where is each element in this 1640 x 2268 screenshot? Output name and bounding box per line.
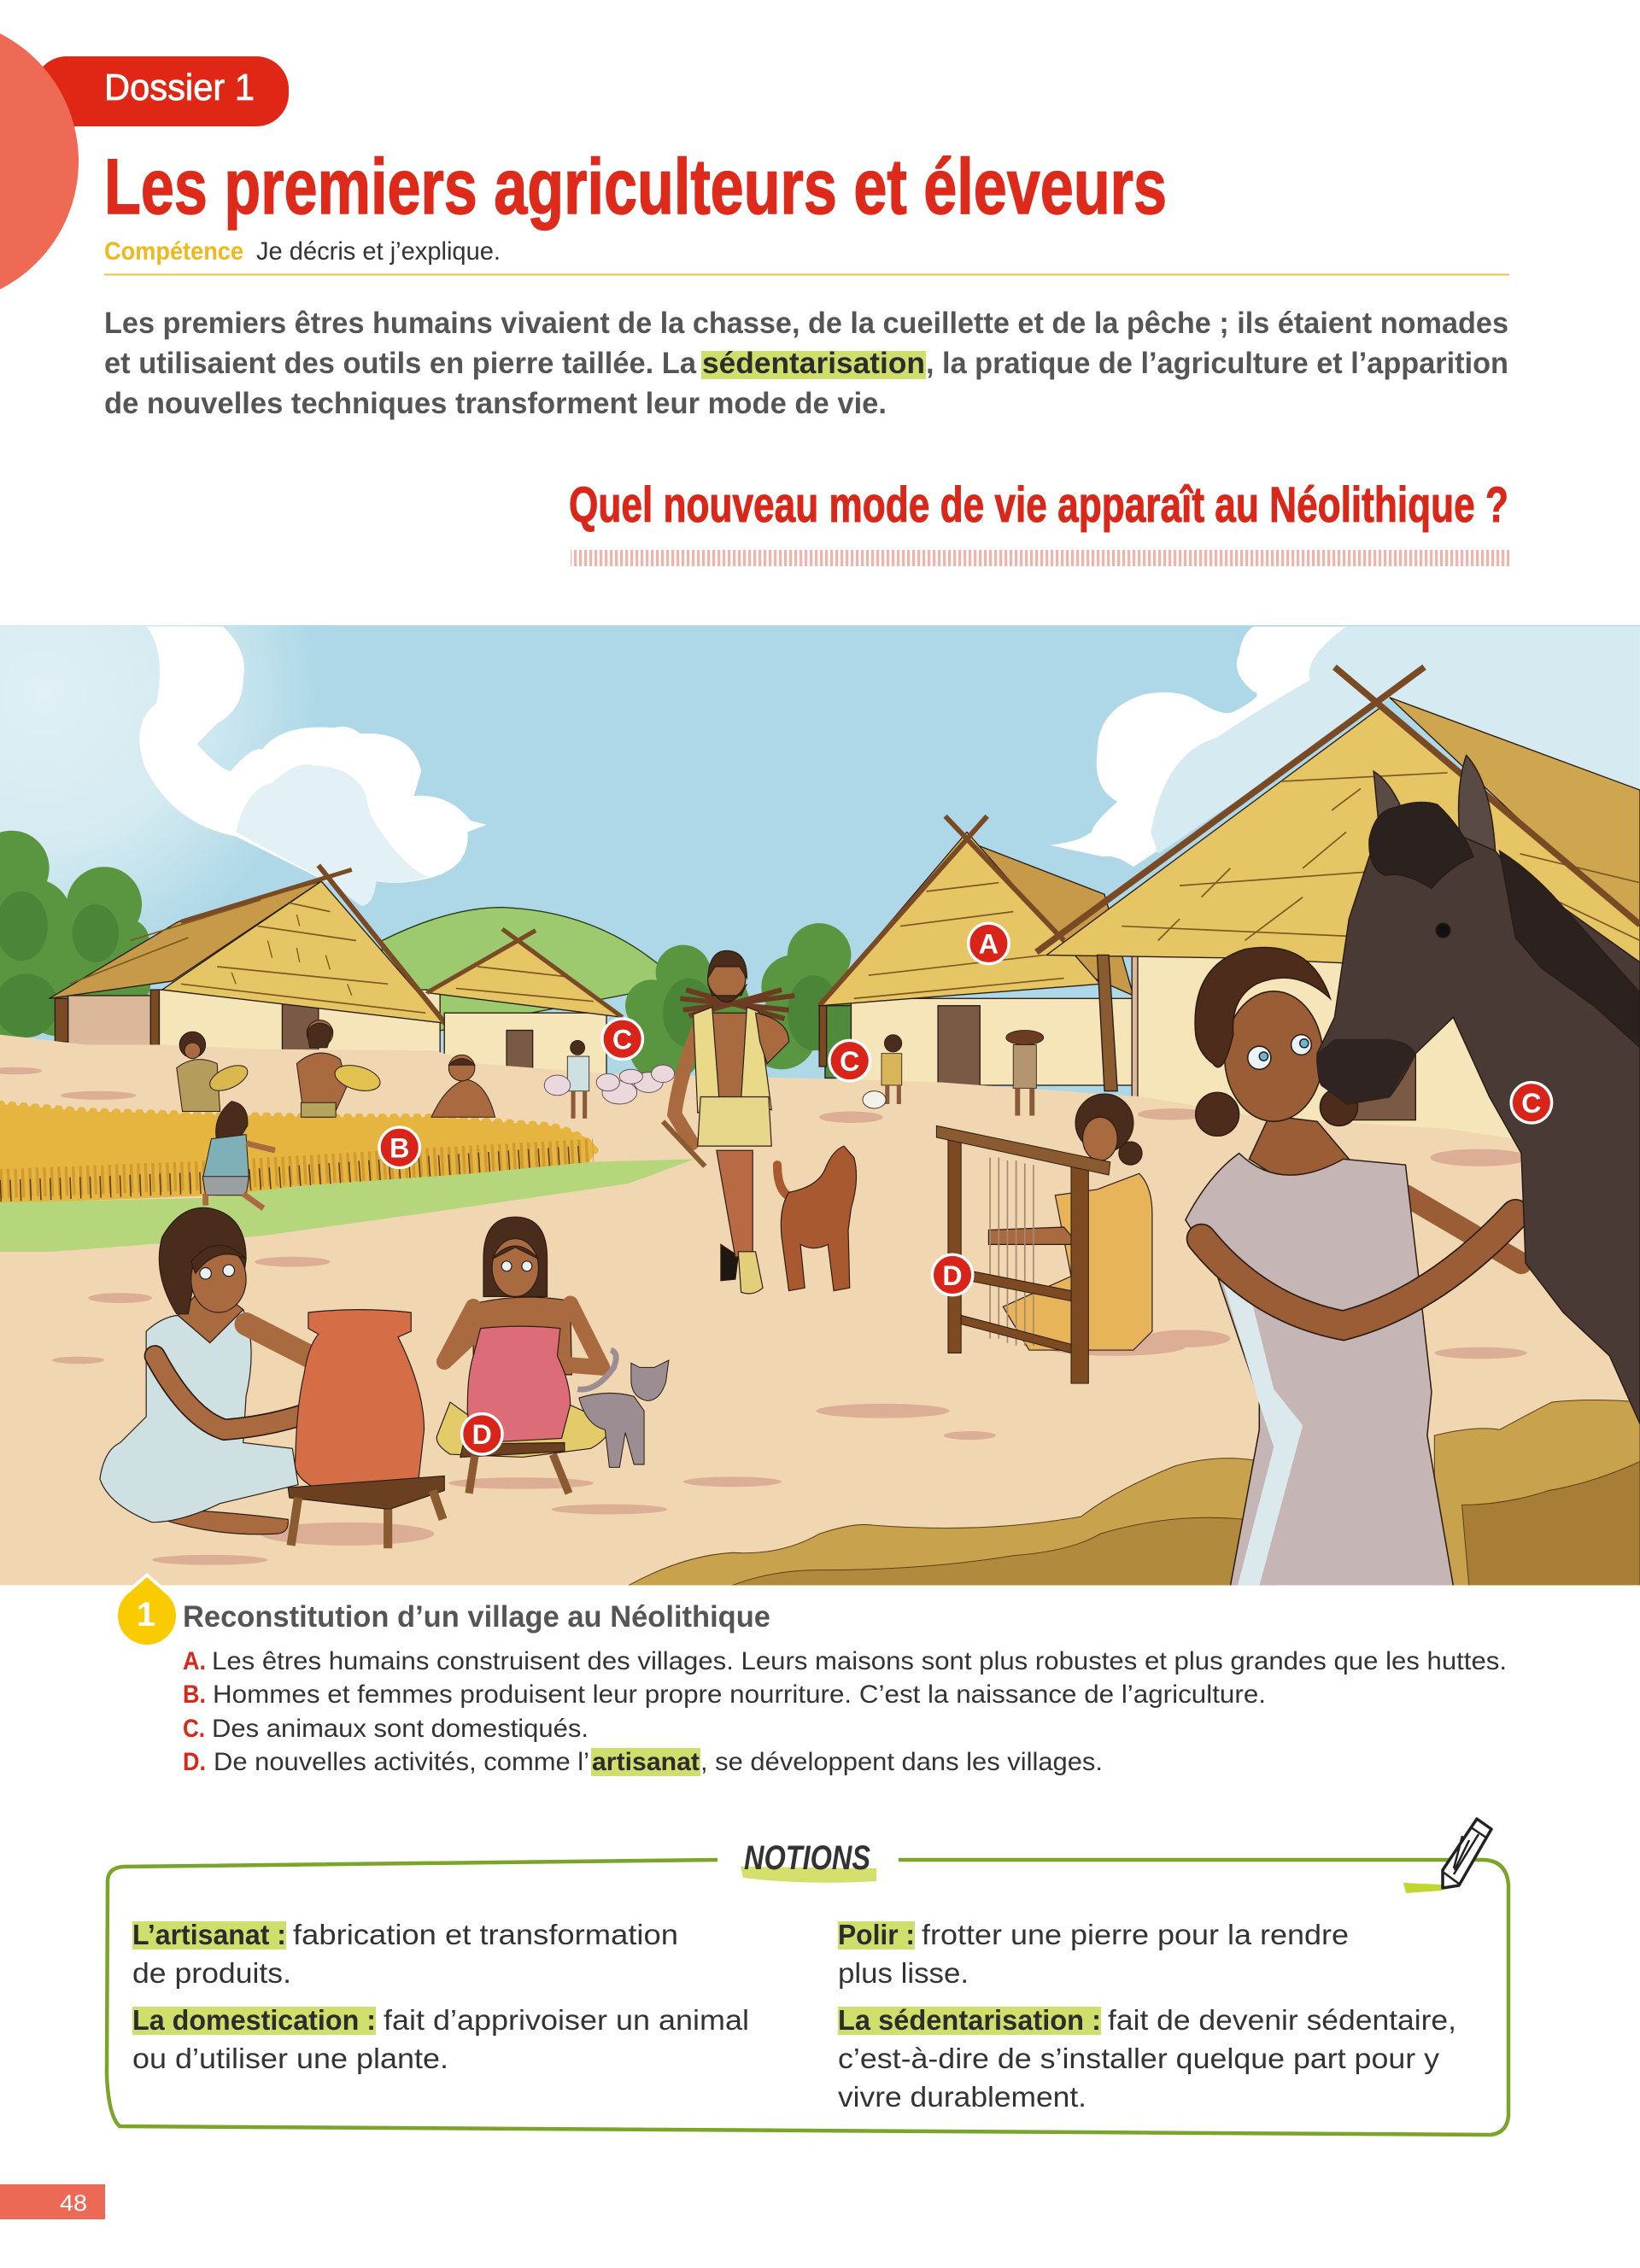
illustration: Neolithic village [0, 625, 1640, 1589]
item C: C. [183, 1715, 205, 1743]
weaver woman [988, 1094, 1152, 1350]
notion: artisanat: L’artisanat : [132, 1919, 286, 1950]
man carrying wood [663, 950, 794, 1294]
cat [577, 1350, 669, 1467]
hut 4 (large) [1036, 667, 1640, 1143]
dog [777, 1146, 857, 1291]
competence line [104, 237, 1509, 275]
item B: Hommes et femmes produisent leur propre nourriture. C’est la naissance de l’agriculture. [213, 1681, 1266, 1709]
right woman [1186, 947, 1521, 1586]
ground [0, 1035, 1640, 1586]
notion: artisanat [132, 1919, 678, 1989]
badge B [379, 1127, 419, 1168]
intro paragraph: Les premiers êtres humains vivaient de la chasse, de la cueillette et de la pêche ; ils étaient nomades [104, 307, 1508, 340]
intro paragraph: et utilisaient des outils en pierre taillée. La [104, 347, 697, 380]
badge C horse: C [1521, 1088, 1542, 1119]
badge C hen [829, 1040, 870, 1081]
item D [183, 1748, 1103, 1776]
intro paragraph [104, 307, 1508, 420]
notion: sedentarisation: La sédentarisation : [838, 2004, 1101, 2036]
competence line: Je décris et j’explique. [256, 237, 501, 266]
trees middle [625, 923, 851, 1076]
badge C goats [602, 1019, 642, 1059]
small man carrying wood [1006, 1031, 1044, 1116]
item B: B. [183, 1681, 206, 1709]
page number [0, 2184, 105, 2219]
panel border [107, 1860, 1508, 2135]
page number: 48 [60, 2190, 87, 2216]
item A: A. [183, 1647, 206, 1675]
decorative salmon circle at page edge [0, 18, 79, 305]
notion: sedentarisation [838, 2004, 1456, 2113]
badge A [969, 923, 1009, 964]
notion: sedentarisation: c’est-à-dire de s’installer quelque part pour y [838, 2043, 1440, 2074]
hill [381, 907, 658, 1032]
notion: artisanat: fabrication et transformation [293, 1919, 678, 1950]
red page tab: dossier label: Dossier 1 [104, 67, 255, 108]
horse [1316, 756, 1640, 1423]
intro paragraph: , la pratique de l’agriculture et l’apparition [926, 347, 1508, 380]
notion: artisanat: de produits. [132, 1957, 291, 1989]
notion: sedentarisation: fait de devenir sédentaire, [1108, 2004, 1456, 2036]
notion: domestication [132, 2004, 749, 2074]
grass [0, 1159, 694, 1252]
badge C goats: C [612, 1025, 632, 1055]
competence line: Compétence [104, 237, 243, 266]
notion: polir: plus lisse. [838, 1957, 969, 1989]
small woman with basket and hen [863, 1035, 902, 1108]
badge D loom [932, 1254, 973, 1295]
caption title: Reconstitution d’un village au Néolithique [183, 1600, 770, 1634]
cloud left [139, 627, 486, 906]
crouching woman in blue [202, 1102, 275, 1208]
badge B: B [390, 1133, 409, 1164]
red page tab: dossier label [34, 56, 289, 126]
notions panel [107, 1819, 1508, 2135]
sheep flock [544, 1065, 675, 1104]
post of hut 4 [1098, 955, 1117, 1091]
hay mounds [623, 1400, 1640, 1589]
notion: domestication: ou d’utiliser une plante. [132, 2043, 448, 2074]
cloud right [1050, 627, 1640, 867]
badge D pottery [462, 1414, 502, 1454]
badge D loom: D [942, 1260, 963, 1291]
notion: polir: Polir : [838, 1919, 915, 1950]
title: Les premiers agriculteurs et éleveurs [104, 143, 1167, 231]
notion: polir [838, 1919, 1349, 1989]
badge C hen: C [840, 1046, 859, 1077]
bearded man with sheaf [296, 1020, 383, 1117]
item D: De nouvelles activités, comme l’ [214, 1748, 589, 1776]
notion: domestication: La domestication : [132, 2004, 376, 2036]
notion: domestication: fait d’apprivoiser un animal [384, 2004, 749, 2036]
back-left harvester woman [177, 1032, 251, 1111]
wheat field [0, 1104, 596, 1204]
document number drop: 1 [137, 1596, 155, 1634]
badge C horse [1511, 1083, 1552, 1123]
notions heading: NOTIONS [744, 1839, 870, 1877]
notion: polir: frotter une pierre pour la rendre [922, 1919, 1349, 1950]
hut 1 [50, 865, 448, 1065]
item D: , se développent dans les villages. [700, 1748, 1103, 1776]
badge A: A [979, 929, 999, 960]
second potter with pink jar [436, 1217, 612, 1493]
hut 2 [427, 929, 623, 1077]
sky [0, 625, 1640, 1117]
document number drop [116, 1573, 178, 1645]
crouching man [431, 1055, 495, 1117]
intro paragraph: de nouvelles techniques transforment leur mode de vie. [104, 387, 887, 420]
icon: pencil [1403, 1819, 1491, 1893]
caption list [183, 1647, 1507, 1776]
trees left [0, 831, 150, 1038]
potter woman and orange jar [100, 1207, 444, 1548]
item A: Les êtres humains construisent des villages. Leurs maisons sont plus robustes et plus grandes que les huttes. [212, 1647, 1507, 1675]
hatched bar under question [571, 550, 1509, 566]
shepherd [567, 1040, 589, 1119]
item D: D. [183, 1748, 206, 1776]
hut 3 [819, 816, 1133, 1087]
item D: artisanat [592, 1748, 700, 1776]
loom [936, 1125, 1110, 1383]
intro paragraph: sédentarisation [702, 347, 925, 380]
badge D pottery: D [472, 1419, 492, 1450]
notion: sedentarisation: vivre durablement. [838, 2081, 1086, 2113]
item C: Des animaux sont domestiqués. [212, 1715, 589, 1743]
ground marks [0, 1067, 1528, 1565]
